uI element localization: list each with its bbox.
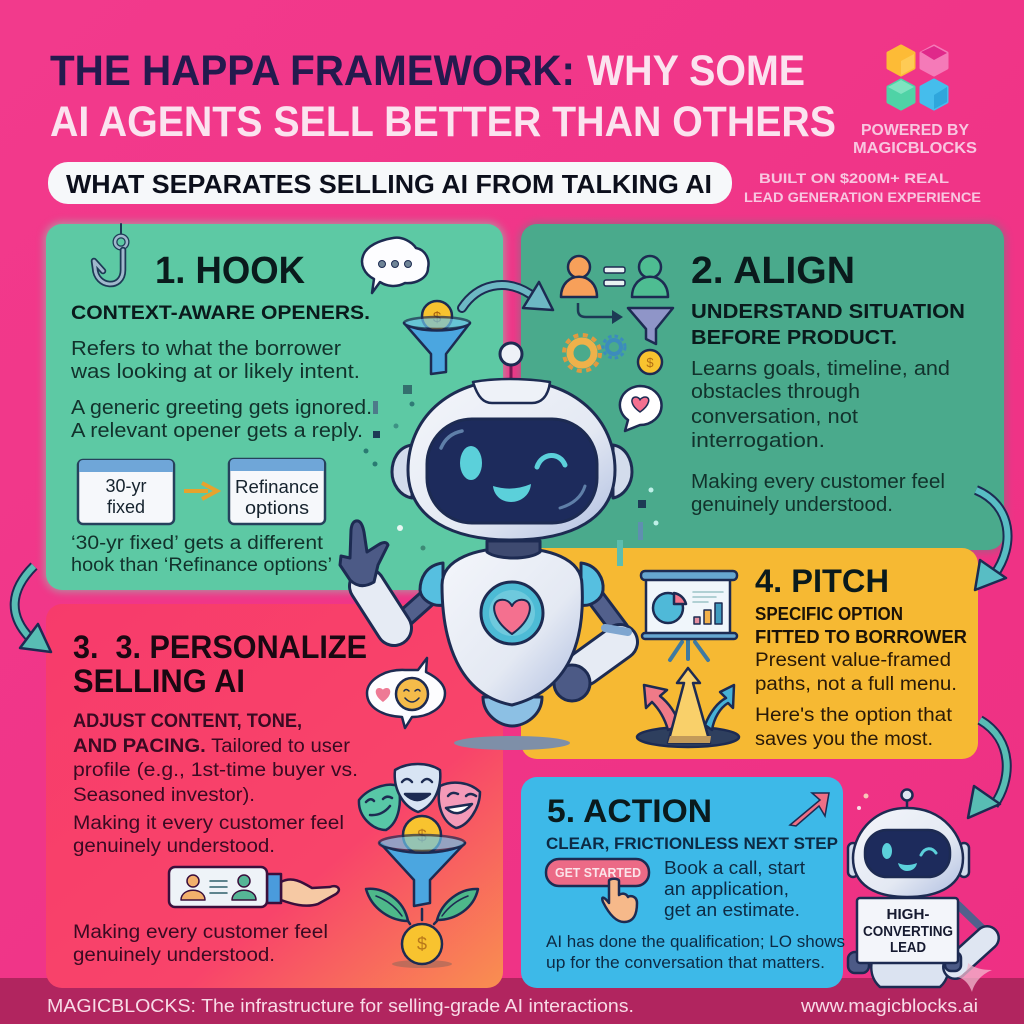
icon: people equal <box>561 256 668 297</box>
small robot head <box>853 808 963 897</box>
text block: pitch description: paths, not a full menu. <box>755 674 957 695</box>
browser window: 30-yr fixed <box>78 460 174 524</box>
robot shadow <box>454 736 570 750</box>
icon: chat bubble dots <box>362 238 428 293</box>
title: WHY SOME <box>587 47 805 95</box>
text block: align description: Making every customer feel <box>691 471 945 493</box>
icon: funnel with coin and leaves: $ <box>417 934 427 954</box>
title: AI AGENTS SELL BETTER THAN OTHERS <box>50 98 836 146</box>
robot body <box>442 548 582 705</box>
subtitle pill: WHAT SEPARATES SELLING AI FROM TALKING AI <box>66 169 712 199</box>
arrow: window to window <box>184 483 217 499</box>
text block: action description: get an estimate. <box>664 900 800 920</box>
small robot with sign <box>848 790 987 987</box>
text block: hook example <box>71 533 332 576</box>
icon: id card and hand <box>169 867 339 907</box>
subheading: pitch <box>755 604 967 647</box>
text block: hook description: was looking at or likely intent. <box>70 361 360 383</box>
small robot body <box>871 960 948 987</box>
heading: personalize <box>73 629 367 699</box>
icon: funnel and coin: $ <box>646 355 654 370</box>
text block: hook description: A relevant opener gets a reply. <box>71 420 363 442</box>
text block: action description: an application, <box>664 879 789 899</box>
text block: personalize description: Making every customer feel <box>73 922 328 943</box>
icon: gears <box>564 335 625 371</box>
icon: funnel with coin <box>404 301 470 374</box>
icon: funnel and coin <box>628 308 673 374</box>
text block: hook description: A generic greeting gets ignored. <box>71 397 372 419</box>
magicblocks logo <box>888 46 947 109</box>
subheading: align: BEFORE PRODUCT. <box>691 327 897 349</box>
browser window: refinance options: options <box>245 498 309 518</box>
icon: fish hook <box>94 224 127 284</box>
text block: pitch description: Here's the option that <box>755 705 953 726</box>
panel: 5 action <box>521 777 845 988</box>
panel: 2 align <box>519 222 1006 552</box>
panel: 1 hook <box>44 222 505 592</box>
sign: high converting lead <box>857 898 958 963</box>
robot head plate <box>473 379 550 403</box>
powered by text: LEAD GENERATION EXPERIENCE <box>744 189 981 205</box>
heading: pitch: 4. PITCH <box>755 563 889 599</box>
sign: high converting lead: HIGH- <box>886 907 930 923</box>
text block: hook example: hook than ‘Refinance options’ <box>71 555 332 576</box>
text block: align description: obstacles through <box>691 381 860 403</box>
text block: personalize description: genuinely understood. <box>73 836 275 857</box>
text block: personalize description: Making it every customer feel <box>73 813 344 834</box>
icon: presentation board <box>641 571 737 660</box>
title: THE HAPPA FRAMEWORK: <box>50 47 575 95</box>
text block: hook description <box>70 338 372 442</box>
browser window: 30-yr fixed: 30-yr <box>105 476 147 496</box>
subheading: pitch: FITTED TO BORROWER <box>755 627 967 647</box>
title <box>50 47 836 146</box>
robot left arm <box>340 521 433 628</box>
text block: align description: conversation, not <box>691 406 858 428</box>
browser window: 30-yr fixed: fixed <box>107 497 145 517</box>
text block: personalize description: ADJUST CONTENT, TONE, <box>73 711 302 732</box>
small robot face <box>882 843 936 871</box>
text block: action description: AI has done the qualification; LO shows <box>546 932 845 951</box>
button: get started <box>546 859 649 886</box>
arrow: hook to align <box>462 282 553 310</box>
icon: bubble with smile <box>367 658 445 728</box>
panel: 3 personalize <box>46 604 503 988</box>
subheading: pitch: SPECIFIC OPTION <box>755 604 903 624</box>
sign: high converting lead: CONVERTING <box>863 924 953 940</box>
powered by text: POWERED BY <box>861 122 969 139</box>
small robot right arm <box>955 905 987 967</box>
icon: heart bubble <box>620 386 662 431</box>
arrow: align to pitch <box>975 490 1008 590</box>
text block: action description <box>546 858 845 972</box>
heading: personalize: 3. 3. PERSONALIZE <box>73 629 367 665</box>
icon: pointing hand <box>602 879 637 922</box>
robot shoulders <box>420 563 603 605</box>
text block: align description: Learns goals, timeline, and <box>691 358 950 380</box>
heading: align: 2. ALIGN <box>691 250 855 292</box>
small robot antenna <box>902 790 912 810</box>
text block: pitch description <box>755 650 957 750</box>
powered by text: MAGICBLOCKS <box>853 140 977 157</box>
powered by text <box>744 122 981 205</box>
footer bar: MAGICBLOCKS: The infrastructure for selling-grade AI interactions. <box>47 996 634 1016</box>
text block: action description: up for the conversation that matters. <box>546 953 825 972</box>
robot ears <box>392 445 632 498</box>
arrow: to funnel <box>578 303 623 324</box>
browser window: refinance options <box>229 459 325 524</box>
text block: action description: Book a call, start <box>664 858 805 878</box>
text block: pitch description: saves you the most. <box>755 729 933 750</box>
heading: hook: 1. HOOK <box>155 250 306 292</box>
robot foot <box>483 697 542 726</box>
arrow: pitch to action <box>968 720 1007 818</box>
icon: masks <box>359 764 480 830</box>
robot mascot <box>340 343 632 750</box>
footer bar: www.magicblocks.ai <box>800 996 978 1016</box>
subheading: align <box>691 301 965 349</box>
panel: 4 pitch <box>521 548 978 759</box>
sparkle watermark <box>957 963 992 992</box>
subheading: action: CLEAR, FRICTIONLESS NEXT STEP <box>546 834 838 853</box>
text block: pitch description: Present value-framed <box>755 650 951 671</box>
subheading: align: UNDERSTAND SITUATION <box>691 301 965 323</box>
robot right arm <box>554 590 628 701</box>
robot neck <box>487 541 540 558</box>
robot face <box>441 431 585 508</box>
small robot visor <box>865 830 950 877</box>
browser window: refinance options: Refinance <box>235 477 319 497</box>
icon: funnel with coin: $ <box>433 309 442 326</box>
icon: funnel with coin and leaves <box>366 816 478 968</box>
footer bar <box>0 978 1024 1024</box>
button: get started: GET STARTED <box>555 866 641 880</box>
subheading: hook: CONTEXT-AWARE OPENERS. <box>71 303 370 324</box>
heading: action: 5. ACTION <box>547 793 712 829</box>
text block: personalize description: AND PACING. Tailored to user <box>73 736 351 757</box>
text block: personalize description <box>73 711 358 966</box>
robot visor <box>427 419 597 523</box>
text block: align description <box>691 358 950 516</box>
small robot ears <box>848 843 969 877</box>
decorative particles <box>364 385 868 810</box>
subtitle pill <box>48 162 732 204</box>
text block: hook example: ‘30-yr fixed’ gets a different <box>71 533 324 554</box>
text block: align description: genuinely understood. <box>691 494 893 516</box>
icon: funnel with coin and leaves: $ <box>417 826 427 845</box>
arrow: hook to personalize <box>15 566 51 652</box>
robot antenna <box>500 343 522 382</box>
text block: hook description: Refers to what the borrower <box>71 338 341 360</box>
robot chest heart <box>481 582 543 644</box>
text block: personalize description: Seasoned investor). <box>73 785 255 806</box>
powered by text: BUILT ON $200M+ REAL <box>759 170 950 186</box>
text block: personalize description: genuinely understood. <box>73 945 275 966</box>
heading: personalize: SELLING AI <box>73 663 245 699</box>
small robot hands <box>848 952 961 973</box>
arrow: up right <box>790 793 829 826</box>
text block: align description: interrogation. <box>691 430 825 452</box>
robot head <box>408 380 615 540</box>
icon: three paths <box>637 668 739 747</box>
text block: personalize description: profile (e.g., 1st-time buyer vs. <box>73 760 358 781</box>
sign: high converting lead: LEAD <box>890 940 926 956</box>
